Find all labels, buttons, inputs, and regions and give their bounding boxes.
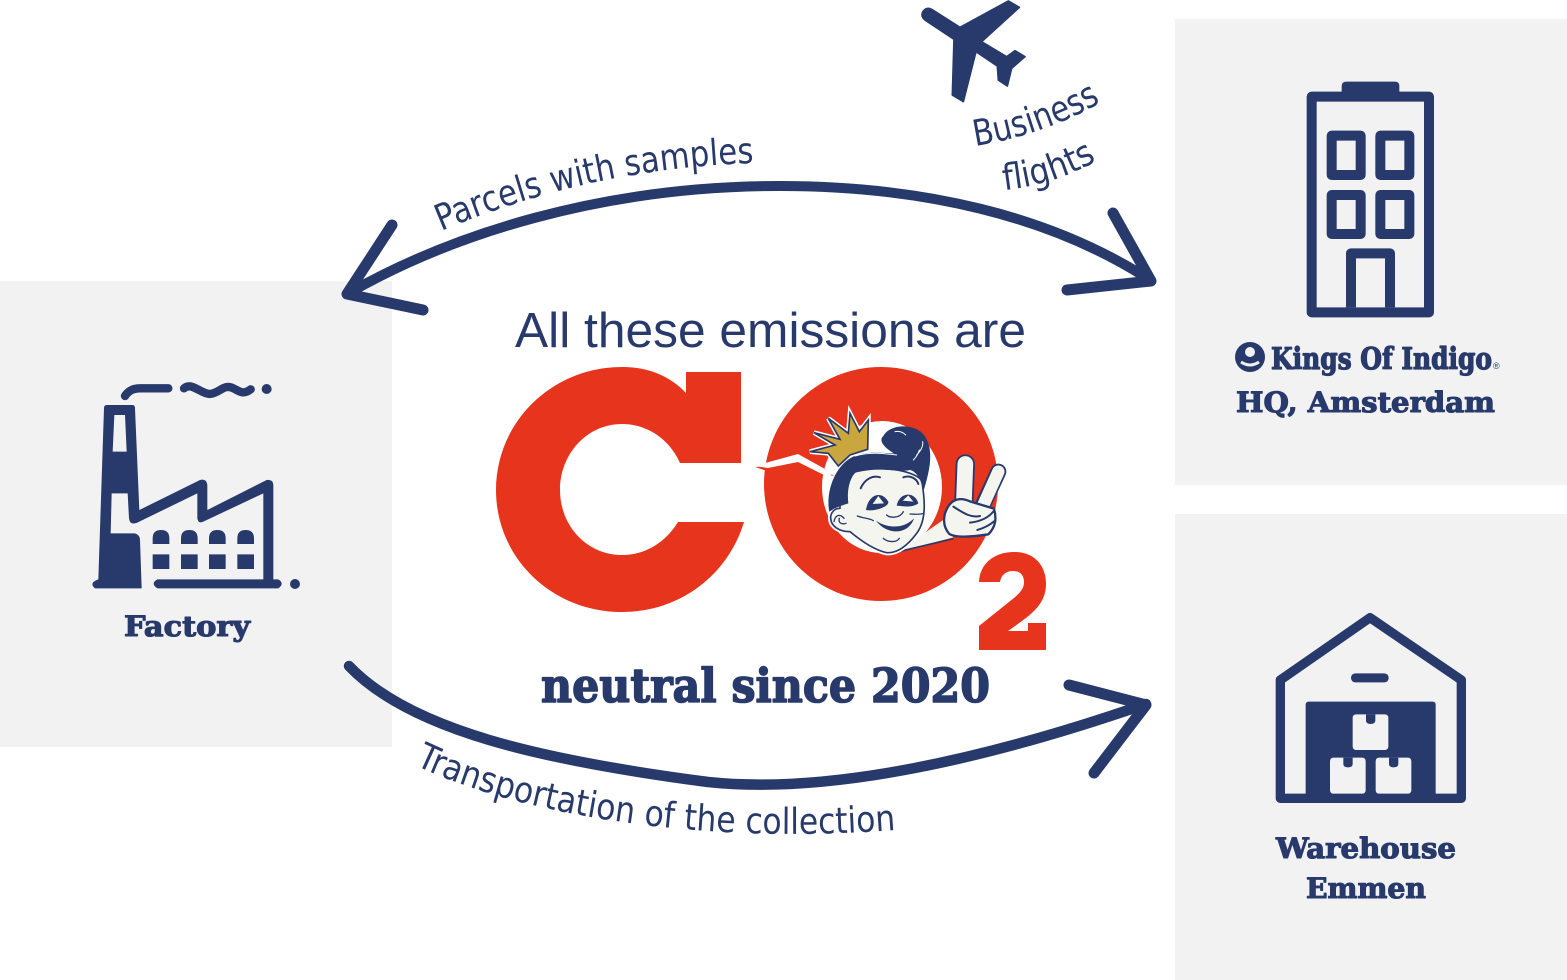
icon: factory xyxy=(92,384,300,589)
label: Emmen: Emmen xyxy=(1306,872,1426,905)
arrow: factory to warehouse xyxy=(349,666,1146,785)
mascot head xyxy=(831,469,924,553)
panel: factory background xyxy=(0,281,392,747)
icon: brand emblem xyxy=(1235,342,1265,372)
label: warehouse: Warehouse xyxy=(1275,832,1456,865)
icon: office building xyxy=(1312,82,1429,312)
panel: headquarters background xyxy=(1175,19,1567,485)
mascot hair xyxy=(828,426,930,512)
logo: CO2 lettering with mascot xyxy=(496,367,1046,650)
brand name: Kings Of Indigo xyxy=(1271,342,1492,377)
label: business flights xyxy=(973,86,1098,192)
logo: Kings Of Indigo brand xyxy=(1235,342,1500,377)
panel: warehouse background xyxy=(1175,514,1567,980)
mascot hand xyxy=(944,464,998,537)
mascot: king boy with peace sign xyxy=(810,413,998,553)
icon: airplane xyxy=(922,1,1025,102)
label: business flights: flights xyxy=(1002,145,1094,192)
lightning spark xyxy=(754,454,834,476)
registered mark: ® xyxy=(1493,361,1500,371)
heading: all these emissions are: All these emissions are xyxy=(515,304,1026,358)
letter O xyxy=(764,367,998,601)
label: HQ Amsterdam: HQ, Amsterdam xyxy=(1236,386,1495,419)
arrow: two-way top arrow between factory and headquarters xyxy=(347,186,1151,310)
mascot face details xyxy=(834,477,923,542)
subscript 2 xyxy=(979,552,1046,650)
label: factory: Factory xyxy=(124,610,251,643)
mascot crown xyxy=(810,413,868,466)
label: transportation of the collection: Transportation of the collection xyxy=(422,741,894,834)
icon: warehouse xyxy=(1280,618,1461,800)
label: parcels with samples: Parcels with samples xyxy=(434,138,752,230)
mascot arm xyxy=(897,519,953,552)
label: business flights: Business xyxy=(973,86,1098,146)
letter C xyxy=(496,367,744,612)
tagline: neutral since 2020: neutral since 2020 xyxy=(541,659,990,714)
